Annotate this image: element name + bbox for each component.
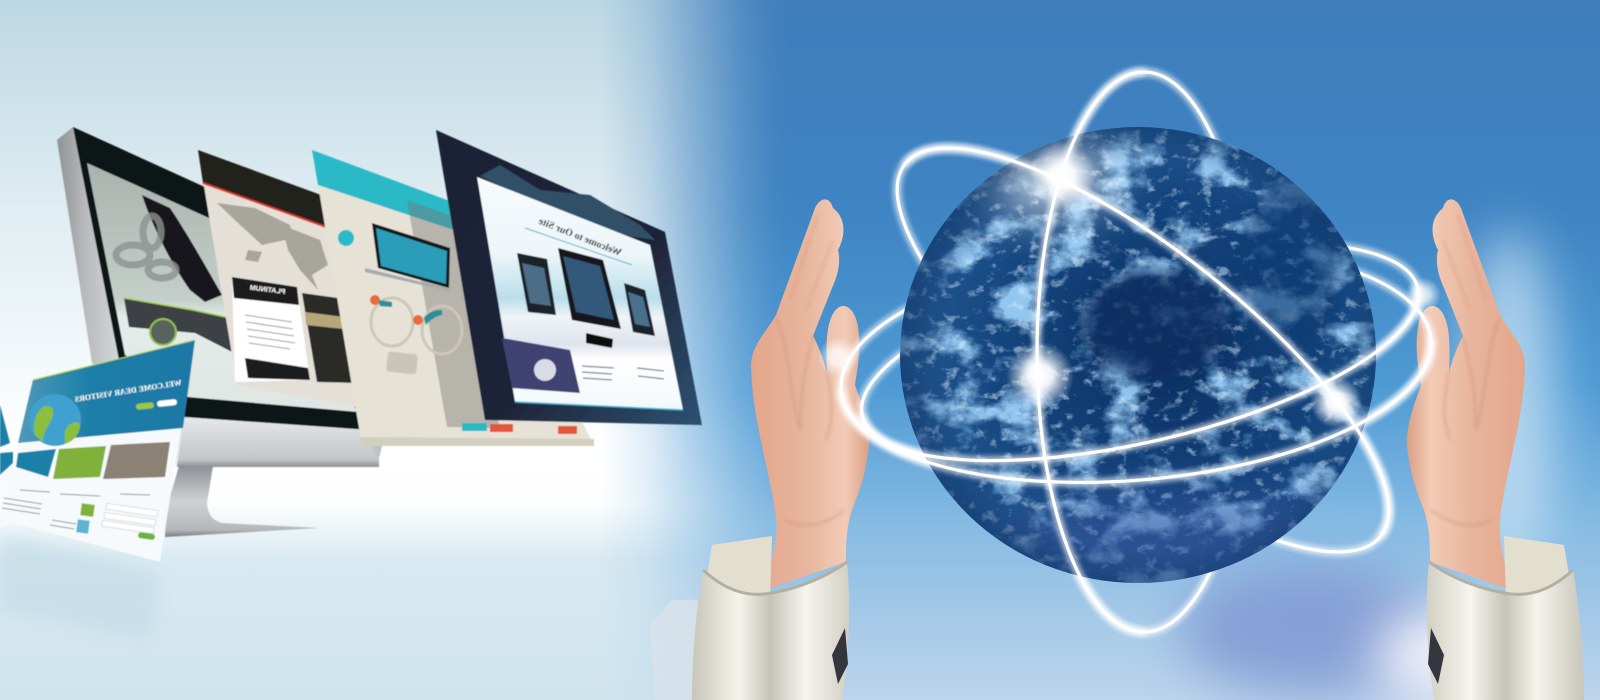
brochure: submit button <box>138 532 155 540</box>
callout badge <box>534 359 556 381</box>
laptop screen <box>376 228 447 284</box>
left phone screen <box>522 263 551 306</box>
brochure: globe <box>29 394 81 446</box>
background: white glow lower right <box>1375 610 1505 700</box>
light flare: lower right <box>1310 376 1362 428</box>
light flare: left <box>818 337 858 377</box>
background: glow behind right hand <box>1465 230 1555 570</box>
back orbits <box>831 72 1443 632</box>
light flare: right <box>1405 277 1441 313</box>
teal ribbons <box>378 300 442 325</box>
right phone <box>624 283 655 336</box>
monitor bezel <box>73 127 420 430</box>
brochure: far blue box <box>0 452 13 475</box>
brochure: green land <box>34 406 80 444</box>
tablet <box>558 248 621 329</box>
globe dark ocean <box>1080 270 1230 380</box>
tablet screen <box>563 256 614 320</box>
laptop base <box>365 268 452 292</box>
background: pale left panel <box>0 0 800 700</box>
pricing card header <box>232 277 299 305</box>
brochure: blue box <box>16 449 56 477</box>
web page: map continents <box>217 203 328 290</box>
front page: purple callout <box>502 338 580 393</box>
pricing card two <box>302 293 360 383</box>
globe lower tint <box>980 495 1360 595</box>
web page: header red rule <box>203 183 340 232</box>
left sleeve <box>692 536 849 700</box>
left hand <box>751 199 869 590</box>
laptop <box>372 223 450 288</box>
brochure: welcome heading: WELCOME DEAR VISITORS <box>74 378 182 404</box>
web page: teal infographic <box>312 150 594 446</box>
monitor stand <box>165 466 319 537</box>
pricing card <box>232 277 310 382</box>
globe top highlight <box>990 135 1110 215</box>
web page: teal header <box>312 150 460 232</box>
light flare: top <box>1028 142 1096 210</box>
right hand <box>1407 199 1525 590</box>
orange tags <box>370 295 423 325</box>
ghost sleeve <box>650 600 698 700</box>
monitor screen: ribbon trim <box>124 298 230 318</box>
front page: text lines <box>582 366 664 380</box>
pricing card lines <box>245 315 295 349</box>
globe fine clouds <box>890 120 1390 590</box>
brochure: green box <box>53 446 106 479</box>
brochure: hero buttons <box>136 399 177 410</box>
pricing card two band <box>305 312 353 330</box>
right phone screen <box>628 292 650 327</box>
right sleeve <box>1427 536 1584 700</box>
front page: cyan footer rule <box>515 402 683 410</box>
brochure <box>0 340 195 562</box>
background: lavender glow lower right <box>1180 565 1440 695</box>
shadow of front page <box>407 200 500 428</box>
brochure: hero left fold <box>0 405 10 447</box>
page footer strip <box>360 437 594 446</box>
pricing card title: PLATINUM <box>249 285 286 296</box>
brochure: brown box <box>103 442 170 479</box>
page buttons <box>462 423 577 434</box>
globe edge shading <box>900 127 1376 583</box>
monitor chin <box>177 417 379 467</box>
front page: header art <box>480 165 655 240</box>
radio icon <box>386 351 418 375</box>
monitor screen: phone artwork <box>142 195 222 302</box>
teal button <box>338 230 354 246</box>
brochure: blue hero <box>18 340 195 443</box>
light flare: centre <box>1006 342 1074 410</box>
chart rings <box>371 298 462 354</box>
globe ocean <box>890 120 1390 590</box>
front page: label chip <box>586 333 613 348</box>
globe <box>890 120 1390 595</box>
globe clouds <box>890 120 1390 590</box>
monitor screen: rings <box>116 216 176 278</box>
brochure: text lines <box>2 490 150 529</box>
brochure: thumbnails <box>76 503 95 534</box>
pricing card footer <box>245 358 310 380</box>
monitor screen: ribbon <box>124 298 232 352</box>
web page: dark front page <box>436 130 702 425</box>
brochure: form fields <box>102 503 158 534</box>
front page: title rule <box>525 228 632 265</box>
globe dark ocean right <box>1240 180 1340 360</box>
left phone <box>517 253 556 315</box>
brochure: green nav rule <box>33 340 195 380</box>
reflection of brochure <box>0 536 160 640</box>
web page: world map <box>198 150 362 408</box>
front page: white content <box>477 177 683 410</box>
web page: header band <box>198 150 340 232</box>
monitor screen <box>87 163 358 412</box>
panel: web design screens <box>0 127 702 640</box>
monitor body <box>57 127 420 467</box>
front page: welcome title: Welcome to Our Site <box>536 216 623 259</box>
monitor screen: badge <box>150 319 176 345</box>
front orbits <box>841 72 1443 632</box>
